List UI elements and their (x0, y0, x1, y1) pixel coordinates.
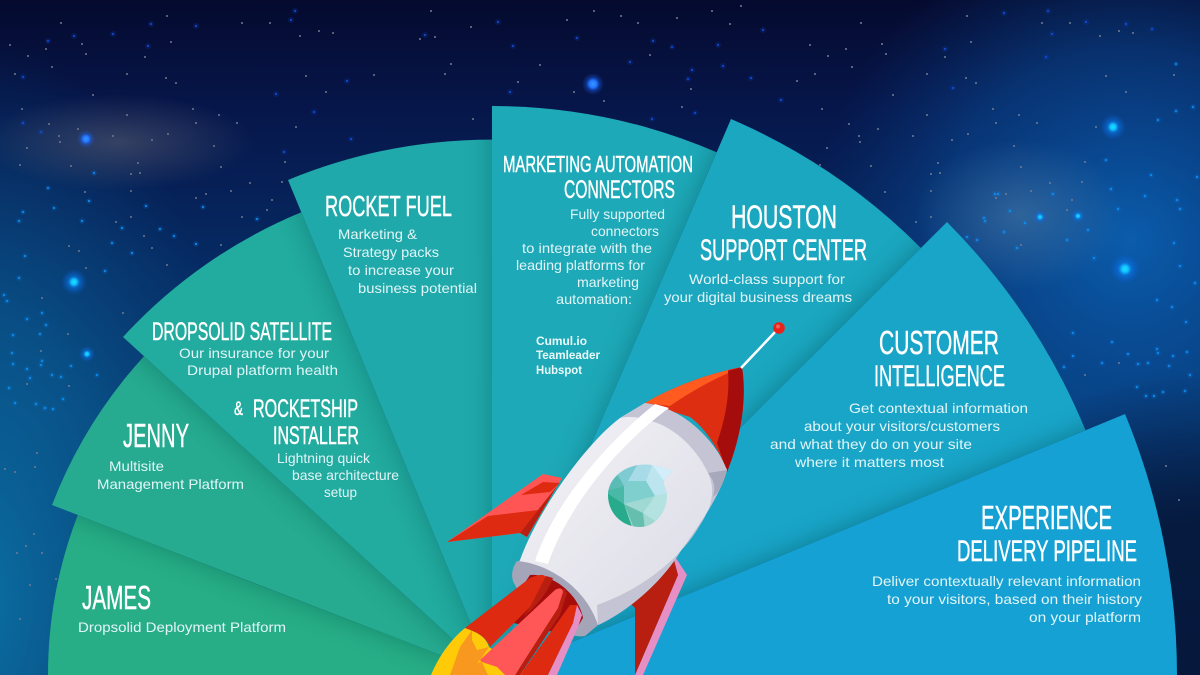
blade shape: Marketing Automation (492, 106, 717, 649)
blade shape: Customer (530, 222, 1086, 659)
connector list: Cumul.io (536, 334, 587, 348)
panel: Dropsolid Satellite and Rocketship Installer (123, 212, 474, 640)
description: Marketing Automation: to integrate with the (522, 240, 652, 256)
heading: Rocketship Installer: INSTALLER (273, 422, 359, 450)
description: Jenny (97, 458, 244, 492)
blade shape: Satellite (123, 212, 474, 640)
description: Marketing Automation: automation: (556, 291, 632, 307)
heading: Rocket Fuel: ROCKET FUEL (325, 191, 452, 223)
panel: Customer Intelligence (530, 222, 1086, 659)
heading: Rocketship Installer (234, 395, 359, 450)
description: Marketing Automation: connectors (591, 223, 659, 239)
illustration: rocket (431, 322, 785, 675)
description: Rocketship Installer: setup (324, 484, 357, 500)
description: James: Dropsolid Deployment Platform (78, 619, 286, 635)
rocket nose cone (645, 367, 744, 472)
heading: Jenny: JENNY (123, 417, 189, 454)
rocket antenna (741, 322, 785, 368)
heading: Houston Support Center: HOUSTON (731, 199, 837, 235)
description: Marketing Automation: marketing (577, 274, 639, 290)
blade shape: Houston (510, 119, 921, 632)
heading: Marketing Automation Connectors: MARKETING AUTOMATION (503, 151, 693, 177)
description: Customer: Get contextual information (849, 400, 1028, 416)
description: Marketing Automation (516, 206, 665, 307)
description: Dropsolid Satellite (179, 345, 338, 378)
rocket engine ring (500, 561, 598, 636)
heading: Marketing Automation Connectors: CONNECTORS (564, 176, 675, 204)
blade shape: Jenny (52, 356, 453, 656)
heading: Houston Support Center (700, 199, 867, 267)
description: Dropsolid Satellite: Our insurance for your (179, 345, 329, 361)
rocket window (608, 464, 673, 527)
heading: Dropsolid Satellite: DROPSOLID SATELLITE (152, 318, 332, 346)
description: Customer: and what they do on your site (770, 436, 972, 452)
description: Experience: Deliver contextually relevant information (872, 573, 1141, 589)
description: Jenny: Multisite (109, 458, 164, 474)
description: Experience (872, 573, 1142, 625)
description: Rocket Fuel: Marketing & (338, 226, 418, 242)
description: Houston: World-class support for (689, 271, 845, 287)
panel: Experience Delivery Pipeline (492, 414, 1177, 675)
description: Experience: to your visitors, based on their history (887, 591, 1142, 607)
blade shape: Experience (492, 414, 1177, 675)
heading: Experience Delivery Pipeline: EXPERIENCE (981, 499, 1112, 536)
connector list: Hubspot (536, 363, 582, 377)
description: Marketing Automation: leading platforms for (516, 257, 645, 273)
description: Customer (770, 400, 1028, 470)
panel: Jenny (52, 356, 453, 656)
description: Rocket Fuel: Strategy packs (343, 244, 439, 260)
rocket body (513, 403, 727, 633)
panel: James (48, 515, 441, 675)
heading: Customer Intelligence: INTELLIGENCE (874, 360, 1005, 393)
connector list (536, 334, 600, 377)
heading: Houston Support Center: SUPPORT CENTER (700, 234, 867, 267)
blade shape: Rocket Fuel (288, 140, 492, 649)
description: Rocket Fuel (338, 226, 477, 296)
heading: Customer Intelligence: CUSTOMER (879, 324, 999, 361)
panel: Marketing Automation Connectors (492, 106, 717, 649)
heading: Customer Intelligence (874, 324, 1005, 393)
heading: Rocketship Installer: & (234, 399, 243, 420)
heading: Experience Delivery Pipeline (957, 499, 1137, 568)
description: Rocketship Installer (277, 450, 399, 500)
panel: Houston Support Center (510, 119, 921, 632)
description: Marketing Automation: Fully supported (570, 206, 665, 222)
connector list: Teamleader (536, 348, 600, 362)
description: Customer: where it matters most (794, 454, 944, 470)
heading: Rocketship Installer: ROCKETSHIP (253, 395, 358, 423)
panel: Rocket Fuel (288, 140, 492, 649)
heading: Marketing Automation Connectors (503, 151, 693, 204)
description: Customer: about your visitors/customers (804, 418, 1000, 434)
description: Houston: your digital business dreams (664, 289, 852, 305)
rocket flames (431, 628, 530, 675)
description: Jenny: Management Platform (97, 476, 244, 492)
description: Rocket Fuel: to increase your (348, 262, 454, 278)
rocket exhaust nozzles (463, 575, 582, 675)
description: Houston (664, 271, 852, 305)
description: Rocketship Installer: base architecture (292, 467, 399, 483)
rear left fin (447, 474, 562, 542)
description: Rocket Fuel: business potential (358, 280, 477, 296)
rear right fin (630, 552, 687, 675)
heading: James: JAMES (82, 579, 151, 616)
description: Experience: on your platform (1029, 609, 1141, 625)
description: Dropsolid Satellite: Drupal platform health (187, 362, 338, 378)
description: Rocketship Installer: Lightning quick (277, 450, 371, 466)
blade shape: James (48, 515, 441, 675)
